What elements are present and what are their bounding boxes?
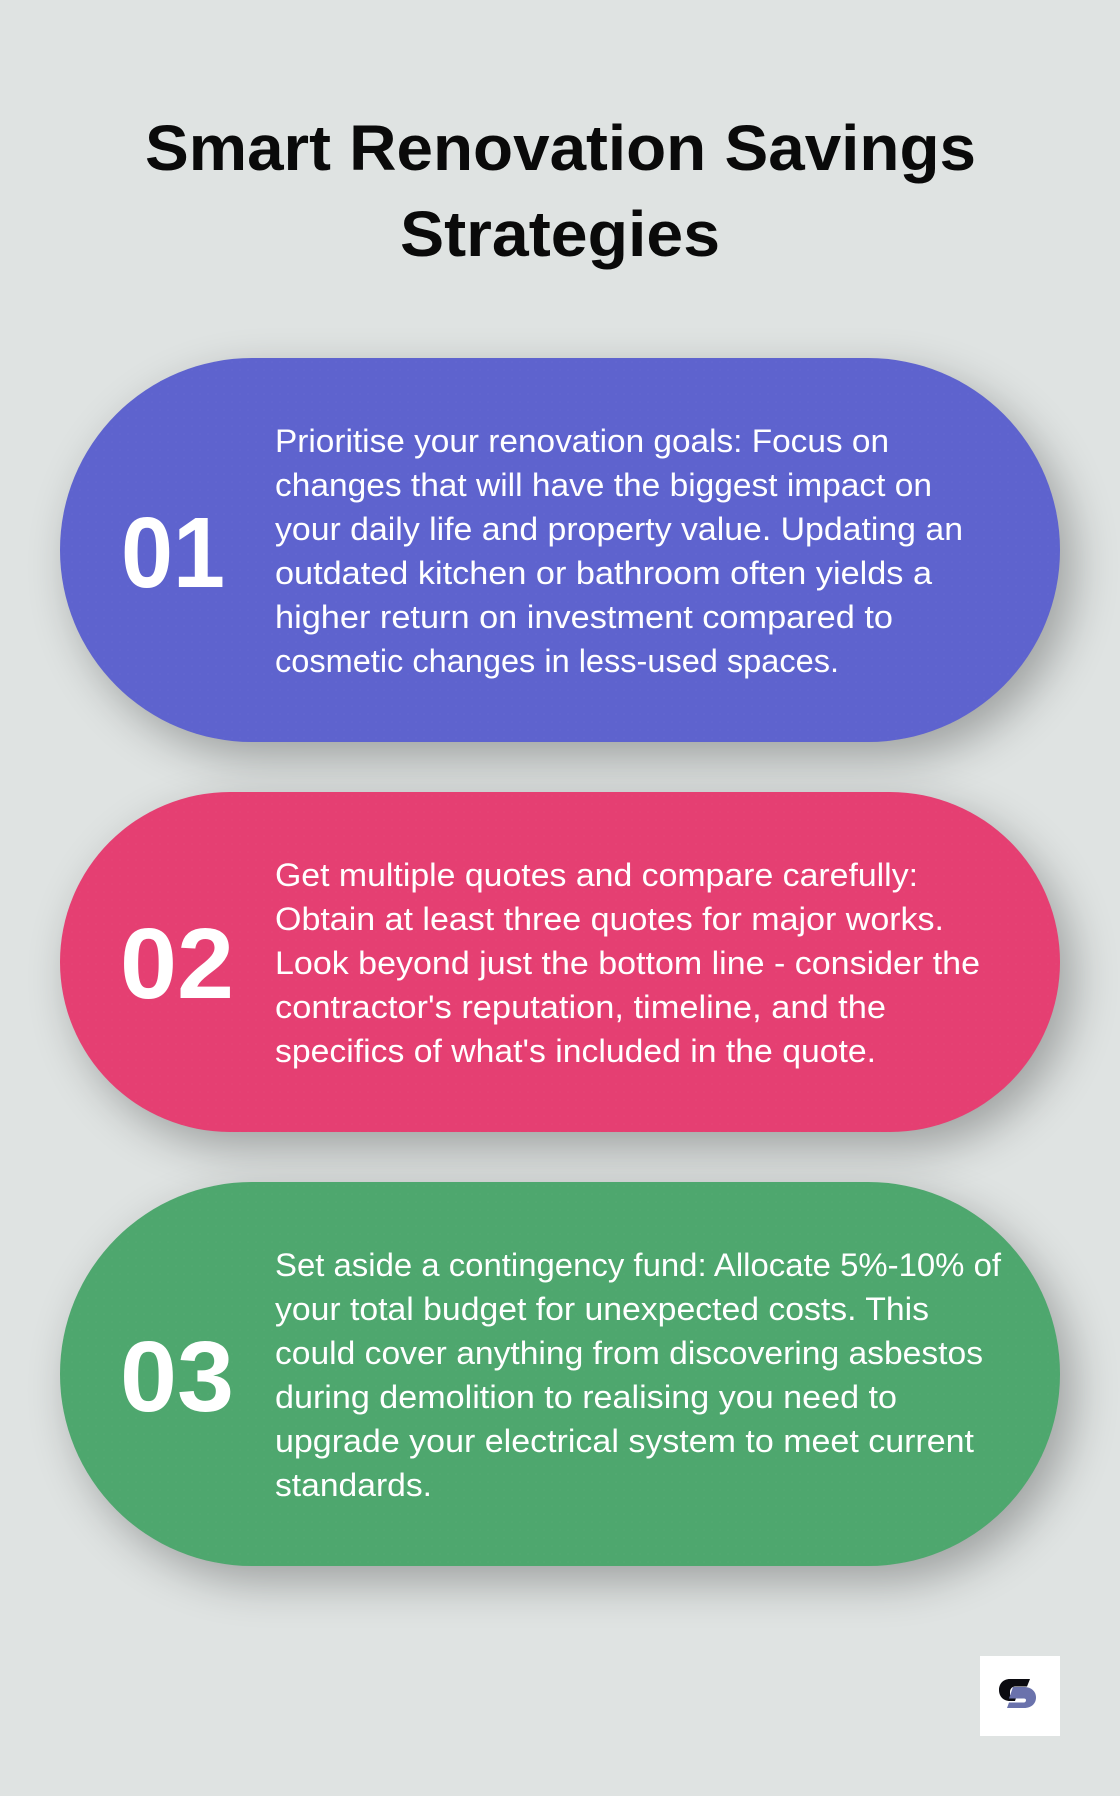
text: step 03 description: your total budget for unexpected costs. This [275, 1291, 929, 1327]
text: step 03 description: upgrade your electrical system to meet current [275, 1423, 974, 1459]
text: step 02 description: Get multiple quotes and compare carefully: [275, 857, 918, 893]
number 02: 02 [120, 908, 234, 1020]
number 01: 01 [121, 497, 225, 609]
text: step 01 description: outdated kitchen or bathroom often yields a [275, 555, 932, 591]
text: step 01 description: Prioritise your renovation goals: Focus on [275, 423, 889, 459]
panel: step 01 [60, 358, 1060, 742]
text: step 03 description [275, 1247, 1001, 1503]
text: step 01 description [275, 423, 963, 679]
text: step 03 description: during demolition to realising you need to [275, 1379, 897, 1415]
panel: step 02 [60, 792, 1060, 1132]
text: step 01 description: cosmetic changes in less-used spaces. [275, 643, 839, 679]
panel: step 03 [60, 1182, 1060, 1566]
number 03: 03 [120, 1321, 234, 1433]
text: step 01 description: your daily life and property value. Updating an [275, 511, 963, 547]
title [145, 112, 976, 270]
text: step 03 description: Set aside a contingency fund: Allocate 5%-10% of [275, 1247, 1001, 1283]
text: step 02 description: specifics of what's included in the quote. [275, 1033, 876, 1069]
text: step 02 description: Obtain at least three quotes for major works. [275, 901, 944, 937]
text: step 01 description: changes that will have the biggest impact on [275, 467, 932, 503]
text: step 02 description: contractor's reputation, timeline, and the [275, 989, 886, 1025]
text: step 02 description: Look beyond just the bottom line - consider the [275, 945, 980, 981]
title: Smart Renovation Savings [145, 112, 976, 184]
text: step 03 description: could cover anything from discovering asbestos [275, 1335, 983, 1371]
text: step 02 description [275, 857, 980, 1069]
text: step 03 description: standards. [275, 1467, 432, 1503]
text: step 01 description: higher return on investment compared to [275, 599, 893, 635]
title: Strategies [400, 198, 720, 270]
icon: logo [980, 1656, 1060, 1736]
